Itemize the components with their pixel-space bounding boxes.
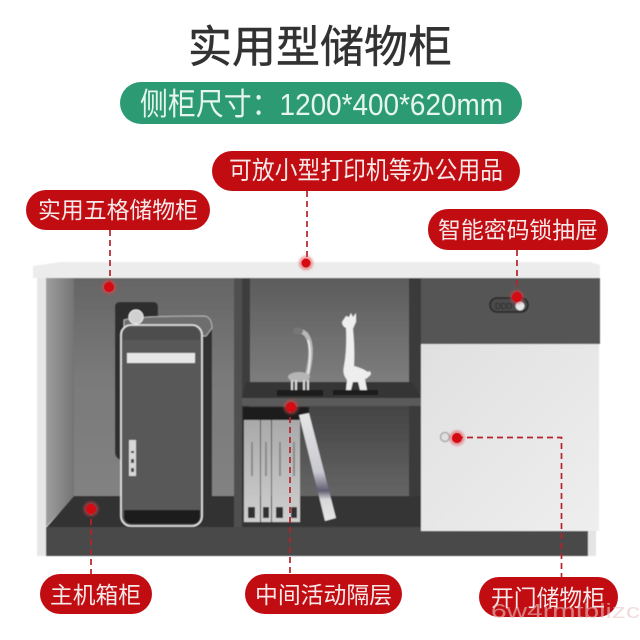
tower base slot (124, 510, 200, 524)
leaning book (299, 413, 336, 521)
callout: movable shelf (245, 574, 402, 614)
callout: five compartments: 实用五格储物柜 (38, 197, 198, 223)
cabinet top board (33, 262, 600, 278)
silver giraffe figurine (277, 328, 323, 396)
book 3 (272, 420, 287, 522)
callout: smart lock drawer (428, 209, 608, 250)
line: lock drawer (516, 250, 518, 297)
dimensions pill: 侧柜尺寸：1200*400*620mm (140, 87, 503, 122)
callout dots (84, 256, 524, 516)
callout: door storage: 开门储物柜 (491, 585, 605, 611)
cabinet right white leg (588, 531, 596, 556)
dot cores (86, 258, 522, 514)
drawer lock: DDD (495, 302, 513, 311)
tower top shadow (123, 327, 200, 340)
callout: host cabinet (40, 574, 152, 614)
line: movable shelf (289, 407, 291, 574)
cabinet floor (46, 496, 236, 528)
callout: smart lock drawer: 智能密码锁抽屉 (438, 217, 598, 243)
cabinet back panel left compartment (73, 278, 235, 498)
book 2 (261, 420, 271, 522)
books (243, 407, 336, 522)
middle compartment floor (242, 496, 422, 527)
white giraffe figurine (333, 313, 378, 395)
right divider (409, 278, 422, 496)
book 1 (244, 420, 260, 522)
line: five compartments (109, 230, 111, 287)
callout: printer storage: 可放小型打印机等办公用品 (229, 157, 503, 185)
shadow above books (243, 407, 309, 420)
drawer front (421, 278, 600, 344)
tower knob (129, 310, 143, 324)
central divider (234, 278, 250, 527)
line: door storage (457, 438, 562, 577)
drawer lock (490, 298, 528, 312)
book 4 (287, 420, 300, 522)
callout: movable shelf: 中间活动隔层 (255, 582, 392, 608)
tower front (121, 325, 202, 526)
callout lines (91, 191, 562, 577)
callout: five compartments (26, 190, 210, 230)
door (421, 344, 599, 531)
cabinet left inner wall (45, 278, 74, 528)
book labels (248, 442, 297, 518)
tower outline (121, 325, 202, 526)
tower side (198, 330, 212, 502)
title: 实用型储物柜 (188, 23, 452, 72)
line: printer (306, 191, 308, 263)
line: host cabinet (90, 509, 92, 574)
middle compartment upper back (249, 278, 410, 382)
cabinet left white side (37, 278, 46, 556)
dot halos (84, 256, 524, 516)
cabinet base front (46, 527, 588, 556)
tower drive label (127, 353, 195, 363)
door knob (440, 432, 450, 442)
callout: door storage (479, 577, 618, 617)
shelf (242, 382, 421, 406)
computer tower (115, 302, 212, 526)
watermark: 6w4rmtblizc (491, 601, 640, 623)
tower top lid (124, 316, 212, 336)
cabinet illustration (33, 262, 600, 556)
tower ports (129, 440, 136, 476)
tower rear bracket (115, 302, 158, 460)
callout: host cabinet: 主机箱柜 (50, 582, 141, 608)
middle compartment lower back (249, 406, 410, 498)
callout: printer storage (212, 151, 520, 191)
